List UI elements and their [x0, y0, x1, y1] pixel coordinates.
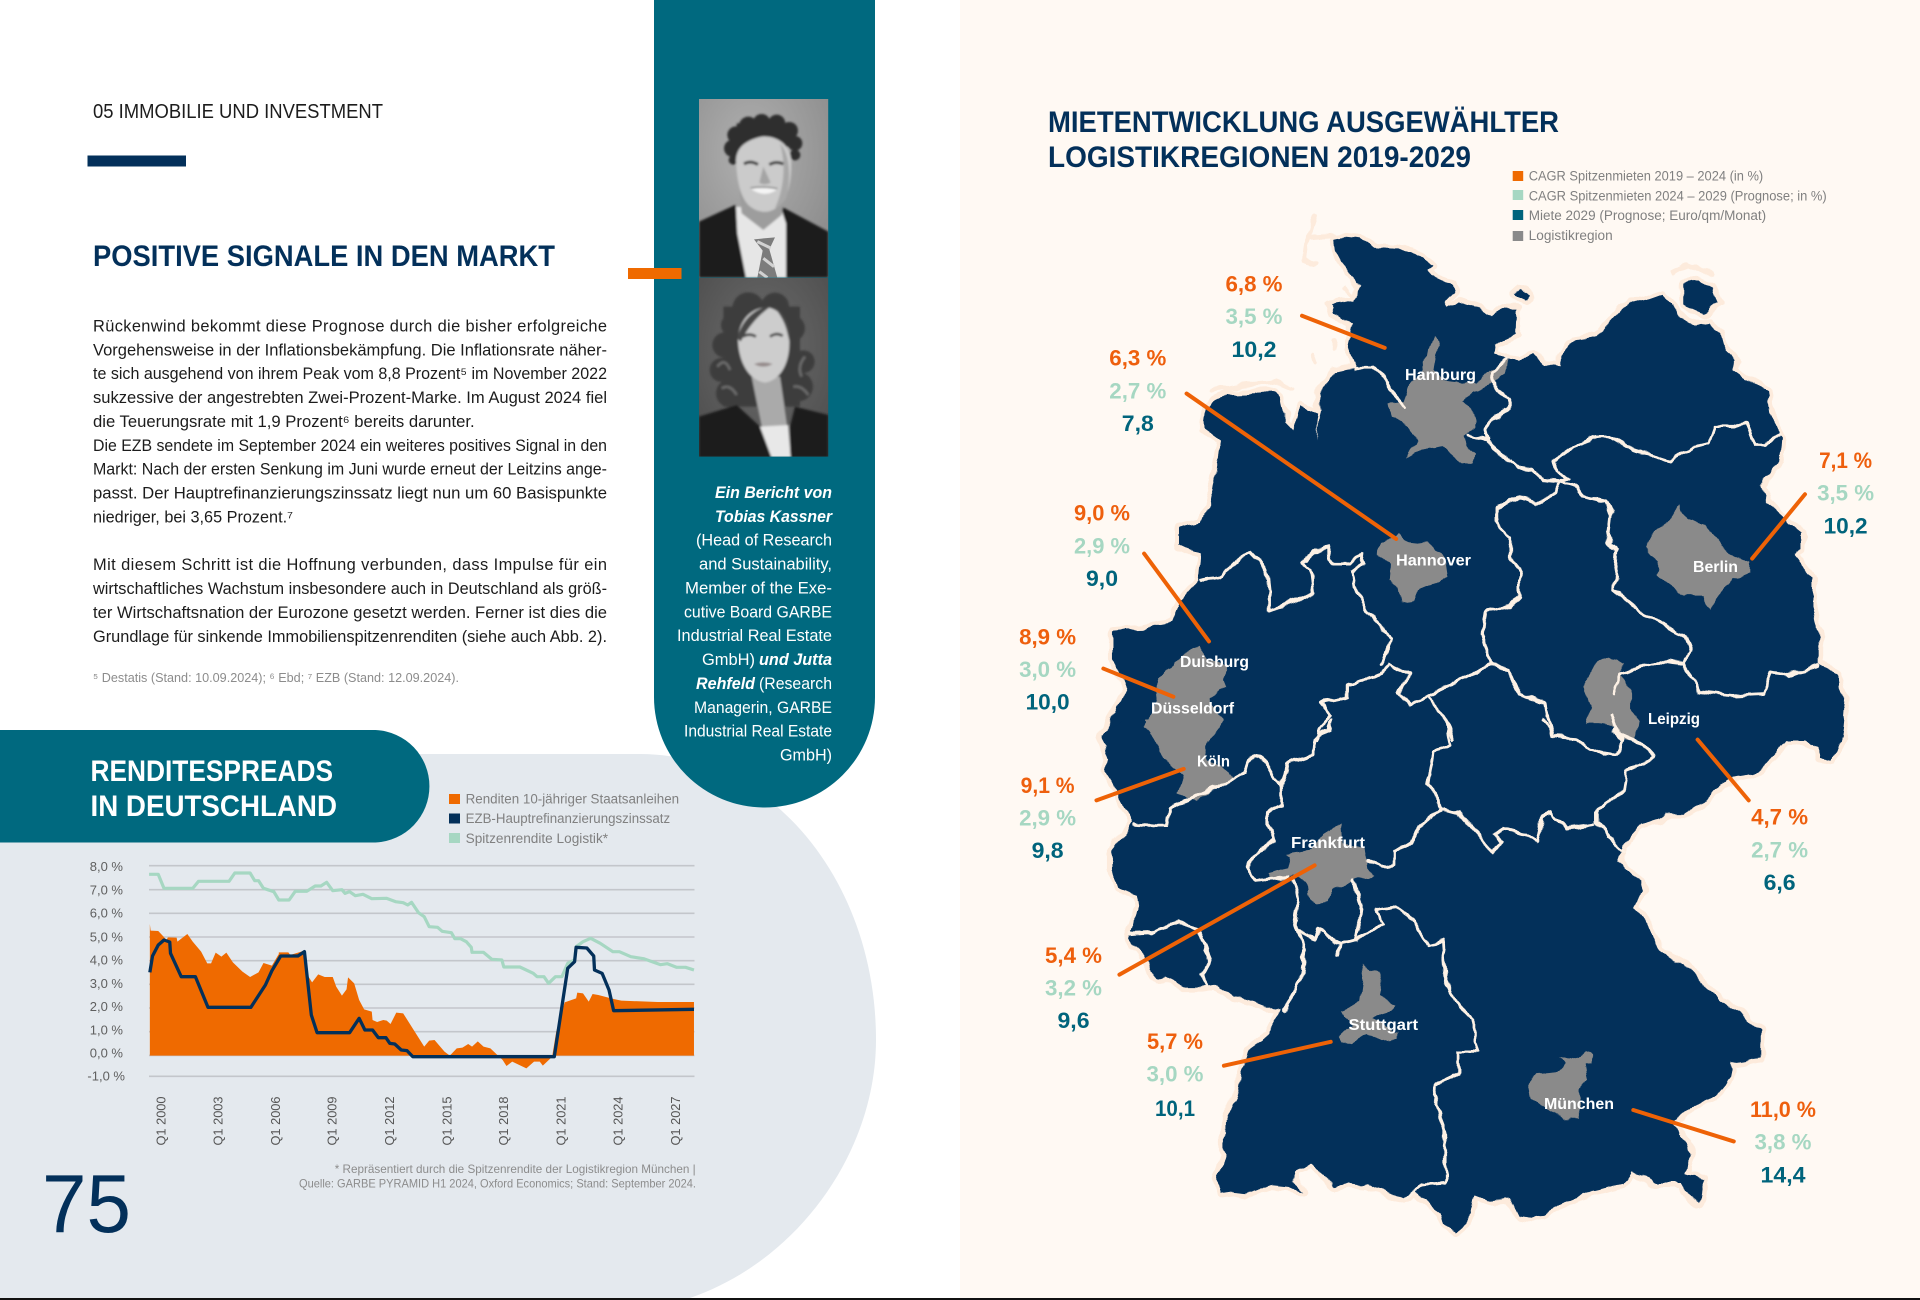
- text block: article body: Die EZB sendete im September 2024 ein weiteres positives Signal in den: [93, 437, 607, 455]
- city labels: München: [1544, 1096, 1614, 1113]
- data: München: 14,4: [1760, 1162, 1806, 1187]
- panel: chart title pill: [0, 730, 429, 842]
- heading: mietentwicklung: MIETENTWICKLUNG AUSGEWÄHLTER: [1048, 106, 1559, 139]
- data: Leipzig: 4,7 %: [1751, 805, 1808, 830]
- text block: author credits: Ein Bericht von: [715, 484, 832, 502]
- legend: chart: Renditen 10-jähriger Staatsanleihen: [466, 792, 679, 806]
- text block: article body: sukzessive der angestrebten Zwei-Prozent-Marke. Im August 2024 fiel: [93, 389, 607, 407]
- data: Leipzig: 6,6: [1764, 870, 1796, 895]
- text block: article body: ter Wirtschaftsnation der Eurozone gesetzt werden. Ferner ist dies die: [93, 604, 607, 622]
- city labels: Berlin: [1693, 559, 1738, 576]
- data: Düsseldorf: [1019, 624, 1076, 715]
- logistics regions: [1144, 338, 1749, 1118]
- text block: article body: [92, 318, 607, 646]
- text block: author credits: [677, 484, 834, 765]
- chart: renditespreads: Q1 2021: [554, 1096, 569, 1146]
- chart: renditespreads: 6,0 %: [90, 906, 123, 920]
- chart: renditespreads: 7,0 %: [90, 882, 123, 897]
- data: Düsseldorf: 8,9 %: [1019, 624, 1076, 649]
- data: Stuttgart: [1146, 1029, 1204, 1121]
- data: Berlin: [1817, 448, 1874, 538]
- city labels: Köln: [1197, 753, 1230, 770]
- state borders: [1129, 359, 1818, 1199]
- leader lines: [1096, 316, 1805, 1141]
- panel: grey chart background: [0, 754, 876, 1298]
- data: Frankfurt: 9,6: [1058, 1008, 1090, 1033]
- text block: author credits: GmbH): [702, 651, 755, 669]
- panel: right page background: [960, 0, 1920, 1300]
- chart: renditespreads: Q1 2012: [382, 1096, 397, 1146]
- data: Duisburg: 9,0: [1086, 566, 1118, 591]
- data: Duisburg: [1074, 501, 1130, 591]
- chart: renditespreads: 3,0 %: [90, 976, 123, 991]
- page number: 75: [42, 1157, 131, 1250]
- chart: renditespreads: 2,0 %: [90, 999, 123, 1014]
- chart: renditespreads: 1,0 %: [90, 1022, 123, 1038]
- legend: map: [1513, 168, 1827, 243]
- chart: renditespreads: Q1 2009: [325, 1096, 340, 1146]
- data: Hannover: 6,3 %: [1109, 346, 1166, 371]
- data: Hamburg: [1226, 271, 1282, 362]
- panel: author column: [654, 0, 875, 808]
- text block: author credits: (Head of Research: [696, 532, 832, 550]
- city labels: Hannover: [1396, 552, 1471, 570]
- chart: renditespreads: Q1 2006: [268, 1096, 283, 1146]
- chart: renditespreads: 0,0 %: [90, 1046, 123, 1060]
- photo: Tobias Kassner: [699, 99, 828, 278]
- legend: map: CAGR Spitzenmieten 2019 – 2024 (in %): [1529, 168, 1763, 184]
- legend: chart: [449, 792, 679, 846]
- data: Stuttgart: 3,0 %: [1146, 1062, 1204, 1086]
- map geometry: [1100, 216, 1845, 1232]
- text block: author credits: (Research: [759, 675, 832, 693]
- text block: author credits: Member of the Exe-: [685, 580, 832, 598]
- legend: map: Logistikregion: [1529, 228, 1613, 243]
- data: Leipzig: 2,7 %: [1751, 837, 1808, 862]
- chart: renditespreads: [87, 859, 694, 1146]
- chart: renditespreads: Q1 2003: [210, 1096, 225, 1146]
- land fill: [1100, 237, 1845, 1232]
- text block: author credits: GmbH): [780, 747, 832, 765]
- chart: renditespreads: Q1 2018: [496, 1096, 511, 1146]
- section label: 05 IMMOBILIE UND INVESTMENT: [93, 101, 383, 123]
- chart source note: Quelle: GARBE PYRAMID H1 2024, Oxford Economics; Stand: September 2024.: [299, 1177, 696, 1191]
- city labels: Duisburg: [1180, 654, 1249, 671]
- data: München: 3,8 %: [1754, 1130, 1812, 1155]
- text block: article body: passt. Der Hauptrefinanzierungszinssatz liegt nun um 60 Basispunkte: [93, 485, 607, 503]
- chart: renditespreads: 8,0 %: [90, 859, 123, 874]
- data: Berlin: 7,1 %: [1819, 448, 1872, 473]
- text block: article body: Rückenwind bekommt diese Prognose durch die bisher erfolgreiche: [93, 318, 607, 336]
- data: Frankfurt: [1045, 943, 1102, 1033]
- heading: mietentwicklung: [1048, 106, 1559, 174]
- data: Hamburg: 6,8 %: [1226, 271, 1282, 296]
- data: Stuttgart: 10,1: [1155, 1096, 1195, 1121]
- legend: map: Miete 2029 (Prognose; Euro/qm/Monat): [1529, 208, 1766, 223]
- data: Düsseldorf: 3,0 %: [1019, 657, 1076, 682]
- data: Köln: [1019, 773, 1076, 863]
- text block: article body: wirtschaftliches Wachstum insbesondere auch in Deutschland als größ-: [92, 580, 607, 598]
- heading: mietentwicklung: LOGISTIKREGIONEN 2019-2029: [1048, 141, 1471, 174]
- data: Hamburg: 10,2: [1232, 337, 1276, 362]
- data: Duisburg: 9,0 %: [1074, 501, 1130, 526]
- chart: renditespreads: Q1 2027: [668, 1096, 683, 1146]
- city labels: Leipzig: [1648, 711, 1700, 728]
- data: Leipzig: [1751, 805, 1808, 895]
- accent: navy bar: [88, 156, 186, 166]
- data: Hannover: [1109, 346, 1166, 436]
- city labels: Hamburg: [1405, 367, 1476, 384]
- data: Köln: 2,9 %: [1019, 806, 1076, 830]
- map: Germany: [1019, 216, 1874, 1232]
- chart: renditespreads: Q1 2000: [154, 1096, 168, 1146]
- chart: renditespreads: Q1 2024: [610, 1096, 626, 1146]
- city labels: Düsseldorf: [1151, 701, 1235, 718]
- text block: author credits: Tobias Kassner: [715, 508, 834, 526]
- text block: author credits: Industrial Real Estate: [684, 723, 832, 741]
- text block: author credits: and Sustainability,: [699, 556, 832, 574]
- data: Berlin: 3,5 %: [1817, 481, 1874, 506]
- data: Hamburg: 3,5 %: [1226, 304, 1282, 329]
- photo: Jutta Rehfeld: [699, 278, 828, 458]
- text block: author credits: Industrial Real Estate: [677, 627, 832, 645]
- data: Frankfurt: 5,4 %: [1045, 943, 1102, 968]
- text block: article body: Grundlage für sinkende Immobilienspitzenrenditen (siehe auch Abb. 2).: [93, 628, 607, 646]
- text block: article body: te sich ausgehend von ihrem Peak vom 8,8 Prozent⁵ im November 2022: [93, 365, 607, 383]
- chart: renditespreads: 4,0 %: [90, 952, 123, 968]
- city labels: Frankfurt: [1291, 835, 1366, 852]
- text block: article body: Vorgehensweise in der Inflationsbekämpfung. Die Inflationsrate näher-: [93, 341, 607, 359]
- data: Köln: 9,1 %: [1021, 773, 1075, 798]
- legend: chart: EZB-Hauptrefinanzierungszinssatz: [466, 811, 670, 826]
- data: Frankfurt: 3,2 %: [1045, 976, 1102, 1000]
- text block: author credits: und Jutta: [759, 651, 832, 669]
- city labels: [1151, 367, 1738, 1113]
- text block: author credits: Managerin, GARBE: [694, 699, 832, 717]
- legend: map: CAGR Spitzenmieten 2024 – 2029 (Prognose; in %): [1529, 188, 1827, 204]
- text block: article body: Mit diesem Schritt ist die Hoffnung verbunden, dass Impulse für ein: [93, 556, 607, 574]
- data: Düsseldorf: 10,0: [1026, 690, 1070, 715]
- data: Stuttgart: 5,7 %: [1147, 1029, 1203, 1054]
- panel: chart title pill: IN DEUTSCHLAND: [90, 790, 337, 823]
- accent: orange tick: [628, 268, 682, 279]
- data: Duisburg: 2,9 %: [1074, 533, 1130, 558]
- chart source note: [299, 1162, 696, 1191]
- data: Hannover: 7,8: [1122, 411, 1154, 436]
- footnotes: ⁵ Destatis (Stand: 10.09.2024); ⁶ Ebd; ⁷ EZB (Stand: 12.09.2024).: [93, 670, 459, 685]
- heading: positive signale: POSITIVE SIGNALE IN DEN MARKT: [93, 240, 555, 273]
- chart: renditespreads: 5,0 %: [90, 929, 123, 944]
- text block: author credits: cutive Board GARBE: [684, 603, 832, 621]
- data: München: [1750, 1097, 1816, 1187]
- text block: article body: Markt: Nach der ersten Senkung im Juni wurde erneut der Leitzins ange-: [93, 461, 607, 479]
- text block: article body: die Teuerungsrate mit 1,9 Prozent⁶ bereits darunter.: [93, 413, 475, 431]
- text block: author credits: Rehfeld: [696, 675, 756, 693]
- city labels: Stuttgart: [1348, 1017, 1419, 1034]
- text block: article body: niedriger, bei 3,65 Prozent.⁷: [93, 508, 293, 526]
- data: Berlin: 10,2: [1824, 513, 1868, 538]
- chart: renditespreads: -1,0 %: [87, 1068, 125, 1084]
- coast halo: [1100, 216, 1845, 1232]
- data: Köln: 9,8: [1032, 838, 1064, 863]
- legend: chart: Spitzenrendite Logistik*: [466, 831, 609, 846]
- panel: chart title pill: RENDITESPREADS: [90, 755, 333, 788]
- chart source note: * Repräsentiert durch die Spitzenrendite der Logistikregion München |: [335, 1162, 696, 1176]
- chart: renditespreads: Q1 2015: [439, 1096, 454, 1146]
- data: München: 11,0 %: [1750, 1097, 1816, 1122]
- data: Hannover: 2,7 %: [1109, 378, 1166, 403]
